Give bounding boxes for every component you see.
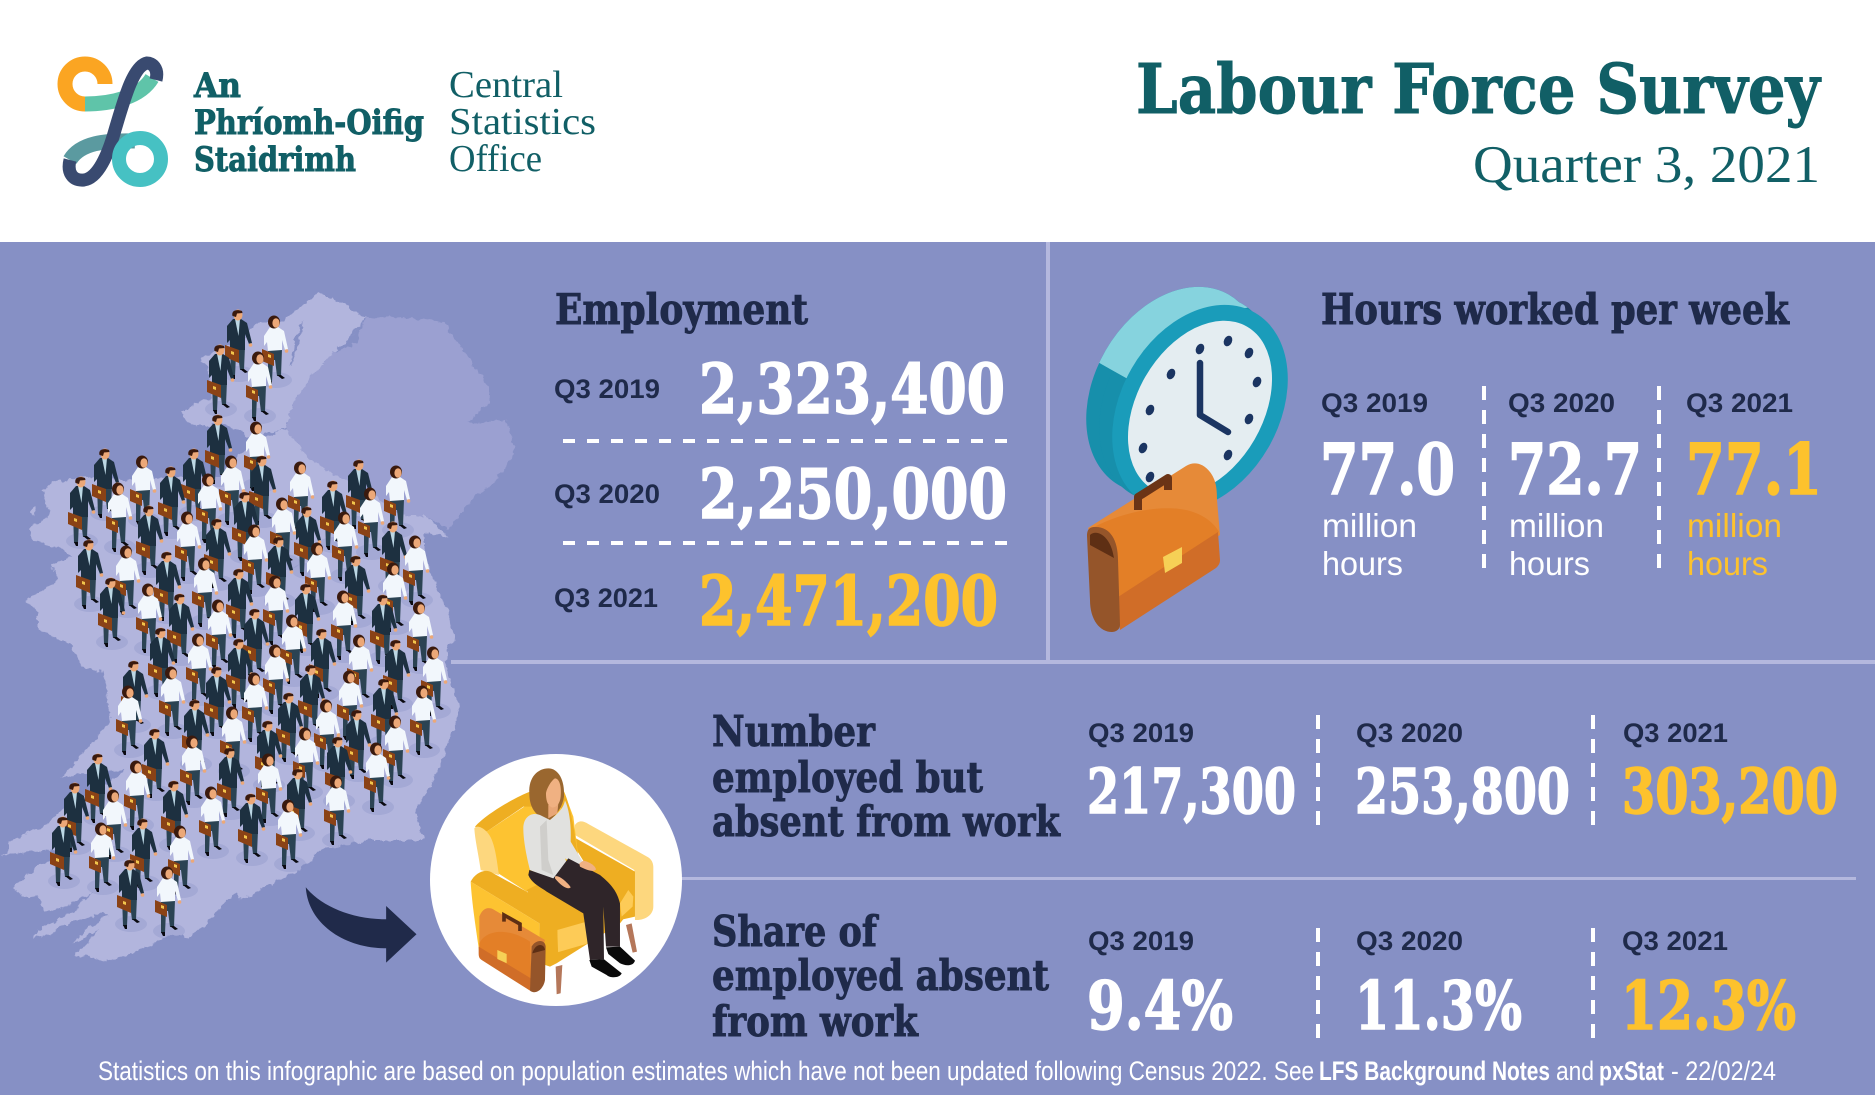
employment Q3 2020: Q3 2020 [554, 479, 660, 509]
panel: share of employed absent from work [712, 907, 1796, 1046]
footer note: Statistics on this infographic are based on population estimates which have not been updated following Census 2022. See [98, 1056, 1314, 1086]
illustration: woman in armchair with briefcase [430, 754, 682, 1006]
share Q3 2021: Q3 2021 [1622, 926, 1728, 956]
logo Irish name: Phríomh-Oifig [194, 103, 424, 143]
hours Q3 2021 [1686, 388, 1822, 582]
employment Q3 2021: Q3 2021 [554, 583, 658, 613]
share Q3 2020 [1355, 926, 1522, 1045]
hours Q3 2019: Q3 2019 [1321, 388, 1428, 418]
logo: Central Statistics Office [65, 63, 596, 180]
employment Q3 2021: 2,471,200 [699, 562, 998, 642]
logo Irish name [193, 66, 424, 180]
absent Q3 2019: 217,300 [1087, 755, 1296, 828]
employment Q3 2020 [554, 455, 1007, 535]
icon: briefcase [1087, 463, 1220, 632]
employment Q3 2019: 2,323,400 [699, 350, 1005, 430]
footer note: pxStat [1599, 1056, 1664, 1086]
logo English name: Office [449, 138, 542, 180]
logo mark [65, 63, 161, 180]
hours Q3 2020: million [1509, 507, 1604, 544]
share Q3 2019: Q3 2019 [1088, 926, 1194, 956]
share Q3 2019: 9.4% [1087, 967, 1233, 1045]
absent heading: absent from work [712, 797, 1061, 846]
share Q3 2021: 12.3% [1621, 967, 1796, 1045]
subtitle: Quarter 3, 2021 [1473, 136, 1820, 194]
share heading: employed absent [712, 951, 1050, 1000]
share Q3 2020: 11.3% [1355, 967, 1522, 1045]
footer note: LFS Background Notes [1319, 1056, 1550, 1086]
absent Q3 2020 [1355, 718, 1570, 828]
share Q3 2020: Q3 2020 [1356, 926, 1463, 956]
hours Q3 2020: hours [1509, 545, 1590, 582]
arrow [306, 887, 416, 963]
footer note: and [1556, 1056, 1594, 1086]
hours Q3 2019: 77.0 [1320, 428, 1455, 511]
crowd of workers on map [48, 310, 451, 939]
absent heading: Number [712, 707, 876, 756]
absent Q3 2021 [1622, 718, 1838, 828]
map of Ireland [0, 293, 515, 962]
hours Q3 2021: 77.1 [1686, 428, 1822, 511]
share Q3 2021 [1621, 926, 1796, 1045]
hours Q3 2021: hours [1687, 545, 1768, 582]
employment heading: Employment [555, 285, 809, 334]
absent Q3 2019 [1087, 718, 1296, 828]
absent Q3 2020: Q3 2020 [1356, 718, 1463, 748]
hours Q3 2020: Q3 2020 [1508, 388, 1615, 418]
hours Q3 2021: Q3 2021 [1686, 388, 1793, 418]
logo Irish name: Staidrimh [194, 140, 356, 180]
divider lines [451, 242, 1875, 880]
share heading: from work [712, 997, 919, 1046]
logo Irish name: An [193, 66, 241, 106]
hours Q3 2020: 72.7 [1508, 428, 1642, 511]
footer note: - 22/02/24 [1671, 1056, 1776, 1086]
logo English name: Statistics [449, 101, 596, 143]
panel: number employed but absent from work [712, 707, 1838, 846]
absent heading: employed but [712, 753, 984, 802]
icon: clock [1086, 286, 1288, 500]
panel: employment [554, 285, 1007, 642]
hours Q3 2019 [1320, 388, 1455, 582]
hours heading: Hours worked per week [1321, 285, 1790, 334]
background panel [0, 242, 1875, 1095]
share heading [712, 907, 1050, 1046]
employment Q3 2020: 2,250,000 [699, 455, 1007, 535]
share Q3 2019 [1087, 926, 1233, 1045]
hours Q3 2019: hours [1322, 545, 1403, 582]
panel: hours worked per week [1320, 285, 1822, 582]
hours Q3 2020 [1508, 388, 1642, 582]
absent Q3 2020: 253,800 [1355, 755, 1570, 828]
hours Q3 2021: million [1687, 507, 1782, 544]
share heading: Share of [712, 907, 879, 956]
absent heading [712, 707, 1061, 846]
employment Q3 2019 [554, 350, 1005, 430]
absent Q3 2019: Q3 2019 [1088, 718, 1194, 748]
absent Q3 2021: Q3 2021 [1623, 718, 1728, 748]
logo English name: Central [449, 64, 563, 106]
employment Q3 2021 [554, 562, 998, 642]
employment Q3 2019: Q3 2019 [554, 374, 660, 404]
hours Q3 2019: million [1322, 507, 1417, 544]
logo English name [449, 64, 596, 180]
